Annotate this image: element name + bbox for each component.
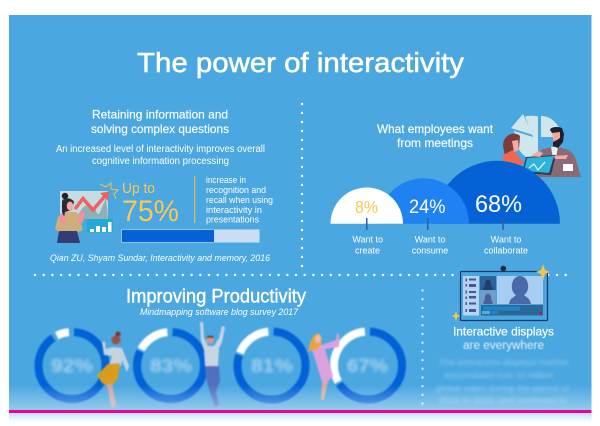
icon: sparkle large [536, 264, 550, 280]
donut values: 81% [251, 356, 293, 376]
statistic description: recognition and [206, 185, 266, 196]
vertical dotted divider [301, 103, 303, 267]
icon: colleagues with pie chart [503, 114, 581, 177]
illustration: woman in purple [308, 333, 339, 400]
title: The power of interactivity [137, 47, 464, 78]
statistic: up to 75% [122, 181, 179, 228]
ticks [366, 218, 504, 230]
heading: Interactive displays [453, 324, 554, 338]
labels: Want to [415, 234, 445, 244]
statistic description [206, 175, 273, 226]
value 8%: 8% [355, 197, 378, 217]
donut: 81% [238, 332, 306, 400]
statistic description: presentations [206, 214, 259, 226]
statistic description: interactivity in [206, 205, 262, 216]
statistic: up to 75%: Up to [122, 181, 155, 197]
heading [377, 122, 494, 150]
semicircle: 24% [378, 178, 469, 224]
illustration: dancing woman [97, 332, 129, 408]
statistic description: recall when using [206, 195, 273, 206]
labels [352, 234, 528, 256]
icon: woman presenting chart [55, 183, 118, 243]
statistic description: increase in [206, 175, 246, 186]
donut values: 83% [150, 356, 192, 376]
labels: consume [412, 246, 448, 256]
chart: semicircles [330, 161, 560, 230]
heading: solving complex questions [91, 122, 229, 136]
value 68%: 68% [475, 191, 522, 218]
heading: Retaining information and [92, 108, 228, 122]
description: global sales during the period of [436, 383, 570, 393]
divider [194, 176, 195, 223]
heading: Improving Productivity [126, 286, 306, 308]
subheading: Mindmapping software blog survey 2017 [140, 307, 299, 317]
heading [91, 108, 229, 136]
donut: 92% [38, 332, 106, 399]
semicircle: 68% [434, 161, 560, 224]
description: 2016 to 2020, and continues to [439, 395, 567, 405]
donut values [51, 356, 388, 376]
labels: create [355, 246, 380, 256]
subheading: are everywhere [463, 340, 544, 352]
bottom fade [9, 385, 592, 411]
heading: from meetings [397, 136, 473, 150]
donut: 67% [334, 332, 402, 400]
panel: improving productivity [38, 286, 402, 408]
labels: collaborate [484, 246, 528, 256]
value 24%: 24% [409, 197, 446, 218]
pink rule [9, 410, 592, 413]
donut values: 92% [51, 356, 93, 376]
under-rule fade [9, 413, 592, 422]
panel: what employees want [330, 114, 581, 256]
panel: retaining information [50, 108, 273, 264]
labels: Want to [352, 234, 383, 244]
progress bar [122, 230, 260, 242]
icon: interactive display [460, 266, 548, 320]
semicircle: 8% [330, 188, 403, 224]
donut charts [38, 332, 402, 400]
labels: Want to [491, 234, 521, 244]
icon: sparkle small [452, 311, 460, 321]
description: The interactive displays market [439, 357, 569, 367]
horizontal dotted divider [35, 274, 574, 276]
citation: Qian ZU, Shyam Sundar, Interactivity and memory, 2016 [50, 253, 271, 264]
description [436, 357, 570, 405]
description: accumulated over 10 million [444, 370, 553, 380]
description: cognitive information processing [92, 156, 229, 167]
donut values: 67% [347, 356, 388, 376]
donut: 83% [137, 332, 204, 399]
statistic: up to 75%: 75% [122, 195, 179, 228]
panel: interactive displays [436, 264, 570, 405]
illustration: jumping man [200, 322, 225, 407]
heading: What employees want [377, 122, 494, 136]
description: An increased level of interactivity improves overall [56, 144, 265, 155]
vertical dotted divider lower [421, 290, 424, 408]
description [56, 144, 265, 167]
